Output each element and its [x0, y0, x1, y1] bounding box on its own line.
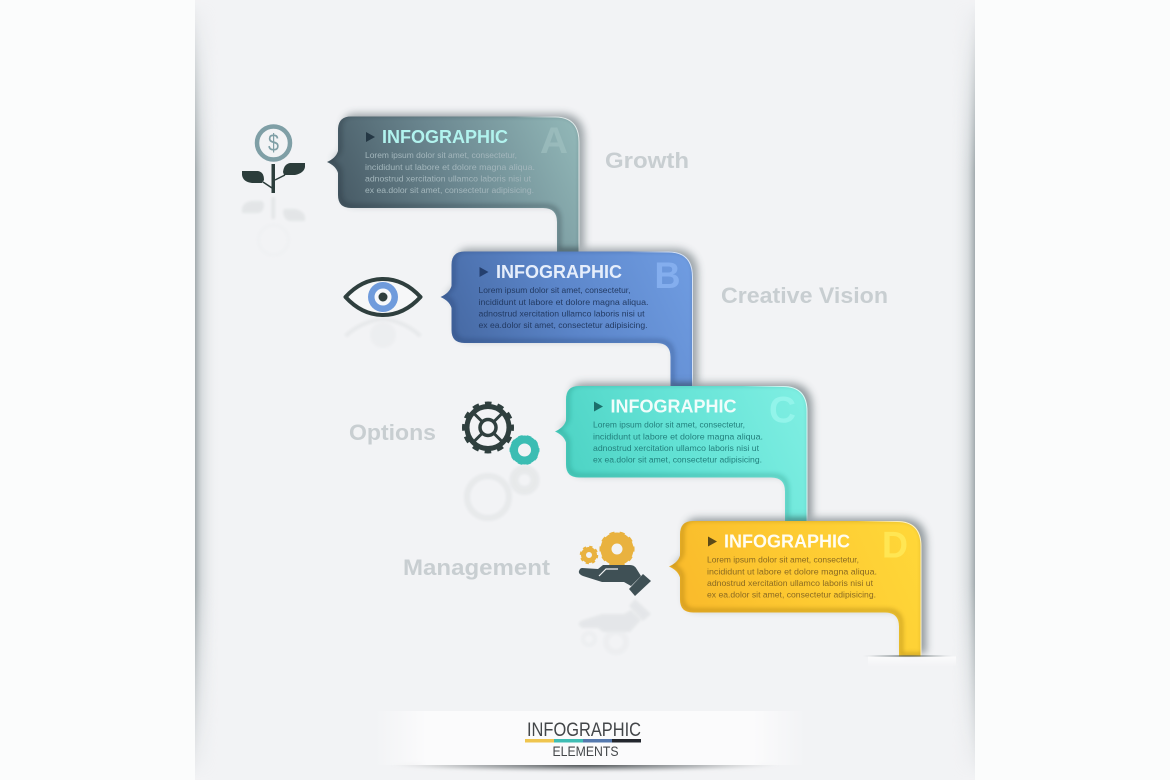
tag D text [707, 554, 877, 600]
tag C letter: C [769, 390, 796, 430]
icon: money plant [242, 126, 305, 255]
tag D text: adnostrud xercitation ullamco laboris nisi ut [707, 578, 874, 588]
label: Growth: Growth [605, 148, 689, 173]
tag A heading: INFOGRAPHIC [382, 127, 508, 147]
footer title: INFOGRAPHIC [527, 719, 641, 741]
tag C text: Lorem ipsum dolor sit amet, consectetur, [593, 420, 745, 430]
tag D with stem [669, 518, 926, 656]
tag A text: Lorem ipsum dolor sit amet, consectetur, [365, 150, 517, 160]
tag C with stem [555, 383, 812, 522]
background panel [195, 0, 975, 780]
tag B text: incididunt ut labore et dolore magna aliqua. [478, 297, 648, 307]
reflection: hand holding gears [579, 599, 651, 652]
tag C text [593, 420, 763, 464]
tag D text: incididunt ut labore et dolore magna aliqua. [707, 566, 877, 576]
icon: gears [464, 404, 538, 518]
label: Management: Management [403, 555, 551, 580]
tag B text: Lorem ipsum dolor sit amet, consectetur, [478, 285, 630, 295]
tag C text: incididunt ut labore et dolore magna aliqua. [593, 432, 763, 442]
tag B letter: B [654, 255, 680, 296]
tag C text: ex ea.dolor sit amet, consectetur adipisicing. [593, 454, 762, 464]
tag B heading: INFOGRAPHIC [496, 262, 622, 282]
tag C text: adnostrud xercitation ullamco laboris nisi ut [593, 443, 760, 453]
tag B text [478, 285, 648, 330]
tag A text [365, 150, 535, 195]
tag D letter: D [882, 524, 908, 566]
label: Options: Options [349, 420, 436, 445]
reflection: money plant [242, 197, 305, 255]
tag D text: Lorem ipsum dolor sit amet, consectetur, [707, 554, 859, 564]
reflection: eye [346, 319, 420, 348]
icon: hand holding gears [579, 533, 651, 652]
footer subtitle: ELEMENTS [552, 743, 618, 759]
footer colour bar [525, 739, 641, 742]
icon: money plant: $ [268, 130, 279, 157]
slot where stem D enters the page [862, 655, 956, 666]
tag C heading: INFOGRAPHIC [610, 396, 737, 416]
tag D text: ex ea.dolor sit amet, consectetur adipisicing. [707, 590, 876, 600]
tag D heading: INFOGRAPHIC [724, 532, 850, 552]
reflection: gears [467, 470, 535, 518]
tag A text: adnostrud xercitation ullamco laboris nisi ut [365, 174, 532, 184]
tag B text: ex ea.dolor sit amet, consectetur adipisicing. [478, 320, 648, 330]
tag A letter: A [540, 120, 568, 161]
tag B text: adnostrud xercitation ullamco laboris nisi ut [478, 308, 645, 318]
icon: eye [346, 279, 420, 348]
tag B with stem [440, 248, 698, 387]
tag A text: incididunt ut labore et dolore magna aliqua. [365, 162, 535, 172]
tag A text: ex ea.dolor sit amet, consectetur adipisicing. [365, 185, 534, 195]
footer banner [375, 711, 805, 772]
tag A with stem [327, 114, 584, 252]
label: Creative Vision: Creative Vision [721, 283, 888, 308]
